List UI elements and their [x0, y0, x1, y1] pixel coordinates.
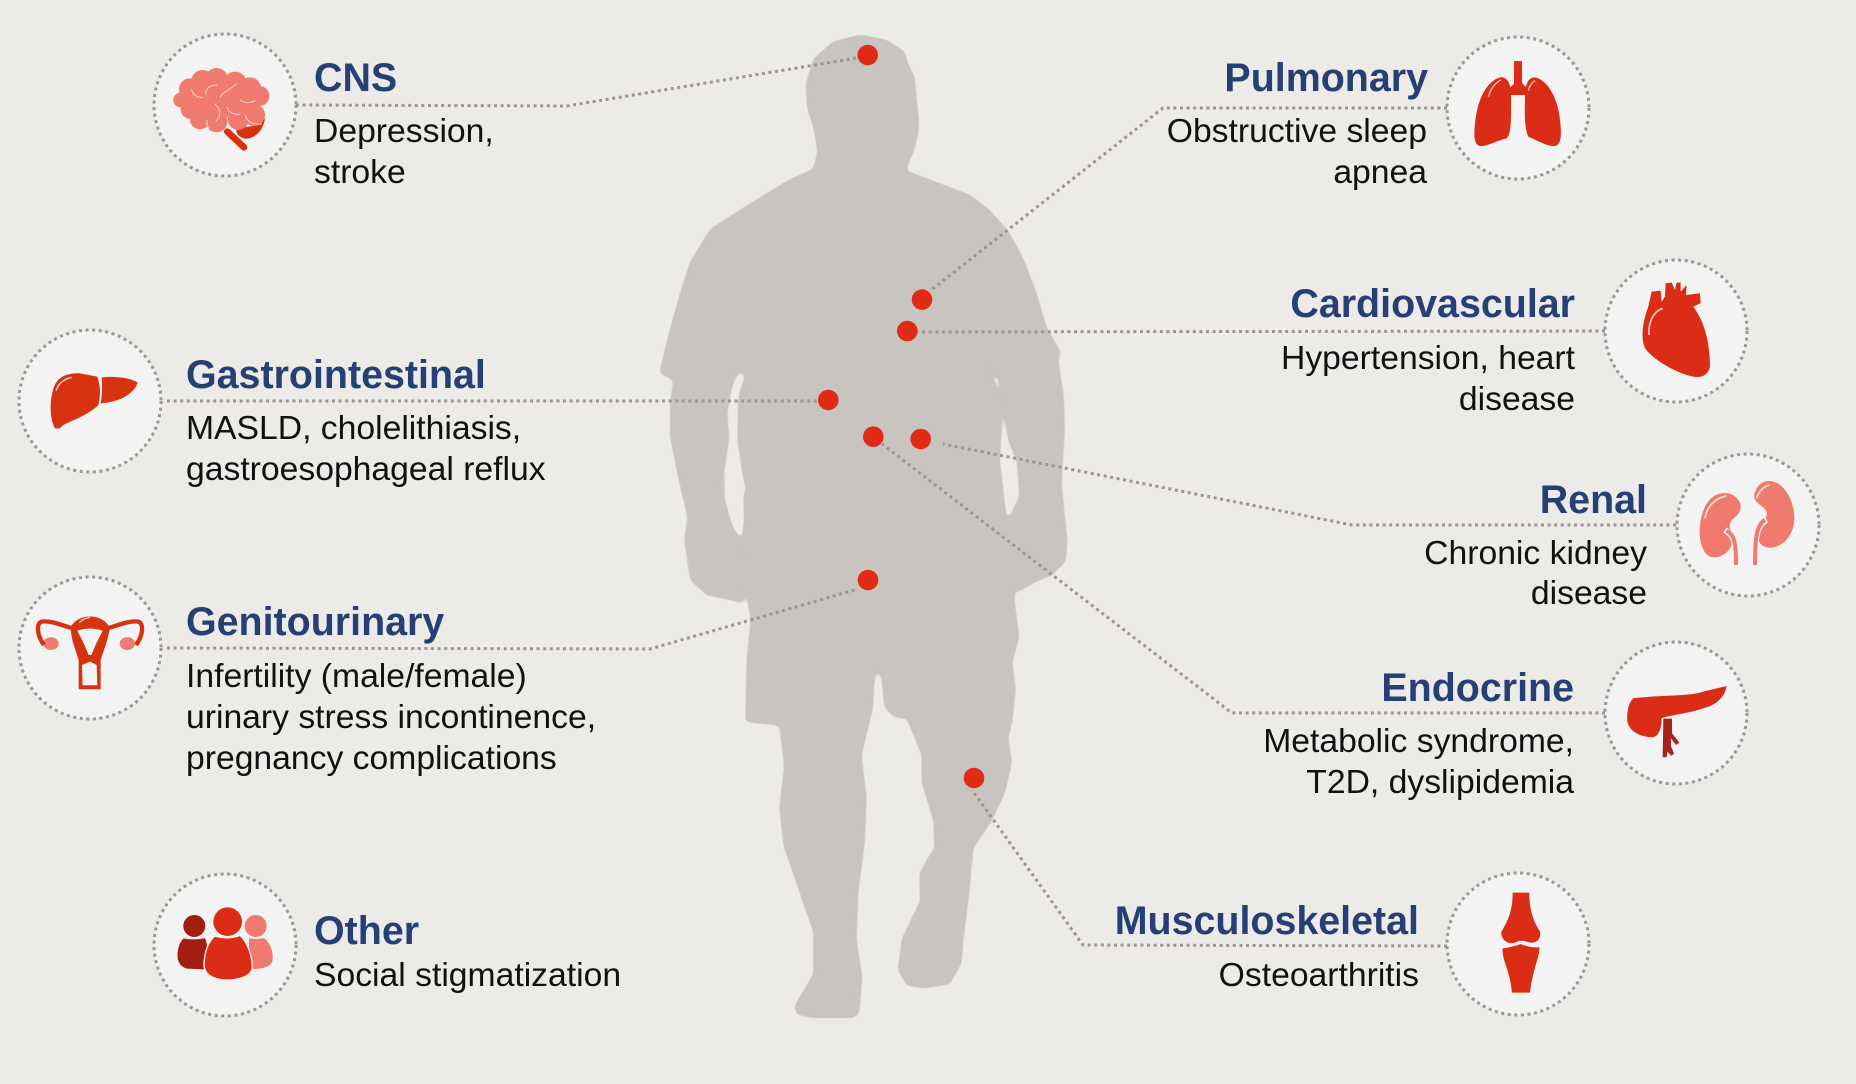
text: Other: Social stigmatization	[314, 956, 621, 994]
text: Genitourinary: Infertility (male/female)	[186, 657, 527, 695]
text: Renal: Renal	[1540, 478, 1647, 522]
text: Gastrointestinal	[186, 353, 546, 488]
text: CNS	[314, 56, 494, 191]
connector: Gastrointestinal	[167, 400, 817, 402]
text: Pulmonary: apnea	[1333, 153, 1427, 191]
icon: knee joint	[1501, 893, 1540, 993]
circle: Cardiovascular	[1605, 260, 1747, 402]
text: Cardiovascular	[1281, 282, 1576, 418]
icon: pancreas	[1627, 686, 1727, 757]
icon: lungs	[1474, 61, 1561, 146]
icon: people	[177, 907, 273, 980]
icon: heart	[1643, 283, 1710, 377]
connector: Musculoskeletal	[972, 790, 1447, 946]
text: Gastrointestinal: gastroesophageal reflux	[186, 450, 546, 488]
text: Other	[314, 909, 621, 994]
text: CNS: stroke	[314, 153, 406, 191]
icon: liver	[51, 373, 138, 429]
text: Cardiovascular: Cardiovascular	[1290, 282, 1575, 326]
text: Genitourinary: urinary stress incontinence,	[186, 698, 596, 736]
text: Cardiovascular: disease	[1459, 380, 1575, 418]
text: Genitourinary: pregnancy complications	[186, 739, 557, 777]
circle: CNS	[154, 34, 296, 176]
text: Endocrine	[1263, 666, 1574, 801]
text: Renal: Chronic kidney	[1424, 534, 1647, 572]
text: Cardiovascular: Hypertension, heart	[1281, 339, 1576, 377]
icon: brain	[173, 68, 269, 147]
text: Renal	[1424, 478, 1647, 612]
text: Genitourinary: Genitourinary	[186, 600, 444, 644]
text: CNS: Depression,	[314, 112, 494, 150]
circle: Endocrine	[1605, 642, 1747, 784]
text: Pulmonary: Pulmonary	[1224, 56, 1428, 100]
text: Other: Other	[314, 909, 419, 953]
text: Endocrine: Metabolic syndrome,	[1263, 722, 1574, 760]
circle: Genitourinary	[19, 577, 161, 719]
icon: kidneys	[1700, 481, 1794, 565]
body silhouette	[659, 34, 1068, 1018]
circle: Musculoskeletal	[1447, 873, 1589, 1015]
text: Gastrointestinal: MASLD, cholelithiasis,	[186, 409, 521, 447]
text: Renal: disease	[1531, 574, 1647, 612]
text: Endocrine: Endocrine	[1381, 666, 1574, 710]
text: CNS: CNS	[314, 56, 397, 100]
text: Pulmonary: Obstructive sleep	[1167, 112, 1427, 150]
circle: Other	[154, 874, 296, 1016]
marker dots	[818, 45, 984, 788]
circle: Gastrointestinal	[19, 330, 161, 472]
text: Endocrine: T2D, dyslipidemia	[1306, 763, 1574, 801]
circle: Pulmonary	[1447, 37, 1589, 179]
connector: Renal	[943, 444, 1676, 525]
connector: Pulmonary	[930, 108, 1447, 291]
connector: CNS	[296, 58, 857, 106]
text: Pulmonary	[1167, 56, 1428, 191]
text: Gastrointestinal: Gastrointestinal	[186, 353, 486, 397]
circle: Renal	[1677, 454, 1819, 596]
connector: Genitourinary	[167, 589, 858, 649]
icon: uterus	[38, 617, 142, 689]
text: Genitourinary	[186, 600, 596, 777]
connector: Cardiovascular	[918, 331, 1605, 332]
text: Musculoskeletal: Musculoskeletal	[1115, 899, 1419, 943]
connector: Endocrine	[882, 444, 1605, 713]
text: Musculoskeletal	[1115, 899, 1419, 994]
text: Musculoskeletal: Osteoarthritis	[1219, 956, 1419, 994]
